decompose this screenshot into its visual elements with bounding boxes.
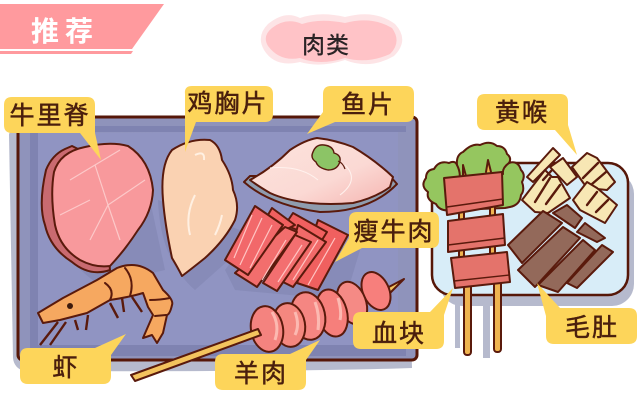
label: 虾: 虾: [52, 354, 80, 382]
label: 羊肉: [215, 340, 320, 390]
label: 毛肚: [537, 283, 637, 344]
panel: right plate: [432, 163, 634, 358]
label: 鱼片: 鱼片: [341, 91, 395, 119]
label: 虾: [20, 334, 126, 384]
food: chicken breast: [162, 140, 237, 276]
label: 黄喉: [477, 94, 577, 155]
label: 毛肚: 毛肚: [565, 314, 619, 342]
heading: 肉类: 肉类: [302, 32, 350, 58]
label: 血块: 血块: [372, 320, 426, 348]
banner: 推荐: [0, 4, 164, 54]
label: 鸡胸片: 鸡胸片: [187, 90, 269, 118]
label: 鱼片: [307, 86, 414, 134]
heading: 肉类: [261, 14, 402, 65]
label: 瘦牛肉: [335, 212, 439, 262]
food: beef sirloin: [42, 144, 153, 272]
banner: 推荐: 推荐: [31, 16, 99, 47]
food: shrimp: [38, 265, 172, 345]
label: 血块: [353, 288, 453, 349]
food: throat strips: [522, 148, 617, 223]
label: 黄喉: 黄喉: [495, 99, 549, 127]
food: lean beef slices: [225, 206, 348, 291]
food: lettuce: [423, 143, 524, 210]
food: fish fillet on plate: [244, 138, 397, 212]
label: 瘦牛肉: 瘦牛肉: [353, 218, 435, 246]
label: 牛里脊: [4, 97, 101, 160]
label: 羊肉: 羊肉: [234, 360, 288, 388]
panel: meat tray: [9, 117, 417, 371]
food: lamb skewer: [131, 267, 404, 381]
label: 鸡胸片: [185, 86, 273, 152]
food: tripe strips: [508, 205, 613, 292]
label: 牛里脊: 牛里脊: [9, 102, 91, 130]
food: blood tofu skewers: [444, 172, 510, 355]
